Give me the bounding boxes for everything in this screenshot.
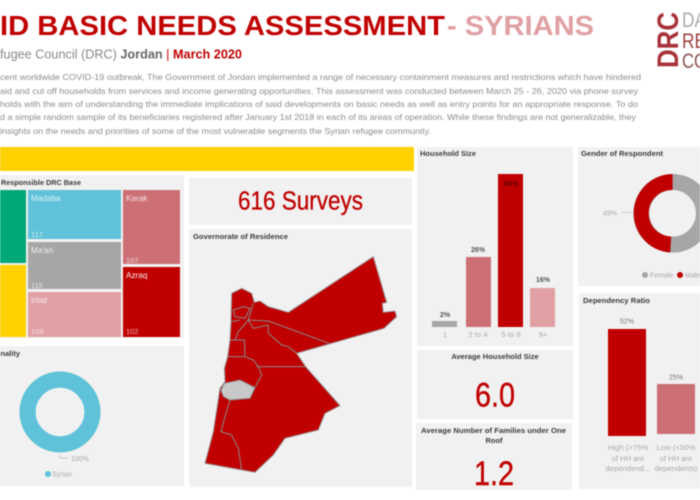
logo: DRC <box>652 9 700 73</box>
panel: average household size: Average Household Size <box>451 352 539 361</box>
intro text block <box>0 72 641 136</box>
panel: surveys count: 616 Surveys <box>238 188 363 216</box>
bar: 5 to 8: 5 to 8 <box>501 330 521 339</box>
panel: families under one roof <box>416 423 572 493</box>
yellow banner <box>0 147 414 171</box>
bar: 2 to 4 <box>466 247 491 339</box>
bar: high dependency: of HH are <box>612 454 644 463</box>
donut chart: gender <box>634 174 700 252</box>
intro text block: cent worldwide COVID-19 outbreak, The Government of Jordan implemented a range of necessary containment measures and restrictions which have hindered <box>0 72 641 82</box>
tile: Ma'an: Ma'an <box>31 246 53 255</box>
heading: responsible DRC base: Responsible DRC Base <box>1 178 81 187</box>
bar: low dependency: Low (<50% <box>657 443 695 452</box>
panel: families under one roof: Roof <box>485 436 503 445</box>
tile: Madaba: Madaba <box>31 194 61 203</box>
panel: average household size: 6.0 <box>475 376 515 414</box>
data label: 100% <box>60 455 89 463</box>
tile: Madaba <box>28 190 121 239</box>
tile: Irbid <box>28 292 121 337</box>
legend: gender <box>642 272 700 280</box>
heading: gender of respondent: Gender of Respondent <box>581 149 664 158</box>
tile: Karak <box>123 190 180 265</box>
map of Jordan <box>205 257 397 472</box>
bar: 1 <box>432 312 457 339</box>
intro text block: holds with the aim of understanding the immediate implications of said developments on basic needs as well as entry points for an appropriate response. To do <box>0 99 638 109</box>
panel: average household size <box>417 350 573 419</box>
panel: responsible DRC base treemap <box>0 175 184 338</box>
tile: Karak: Karak <box>126 194 148 203</box>
bar: 1: 2% <box>440 312 451 319</box>
bar: high dependency: High (>75% <box>608 443 648 452</box>
bar: 5 to 8: 58% <box>504 181 519 188</box>
legend: gender: Female <box>650 272 673 280</box>
bar: low dependency: of HH are <box>660 454 692 463</box>
bar: 9+: 16% <box>536 277 551 284</box>
bar: 9+: 9+ <box>539 330 548 339</box>
bar: 9+ <box>530 277 555 339</box>
tile: Madaba: 117 <box>31 230 43 239</box>
tile: Ma'an: 115 <box>31 281 43 290</box>
tile: Irbid: Irbid <box>31 296 47 305</box>
panel: families under one roof: 1.2 <box>474 455 514 493</box>
tile: Azraq: 102 <box>126 327 139 336</box>
bar: 1: 1 <box>443 330 447 339</box>
bar: high dependency: dependend... <box>606 464 650 473</box>
intro text block: aid and cut off households from services and income generating opportunities. This assessment was conducted between March 25 - 26, 2020 via phone survey <box>0 86 639 96</box>
tile: yellow <box>0 265 26 337</box>
panel: gender of respondent <box>578 147 700 286</box>
tile: Azraq <box>123 267 180 337</box>
legend: Syrian <box>45 471 72 478</box>
data label: 49%: 49% <box>603 210 617 218</box>
heading: governorate of residence: Governorate of Residence <box>193 232 288 241</box>
panel: surveys count <box>189 178 412 225</box>
bar: 2 to 4: 2 to 4 <box>468 330 488 339</box>
bar: high dependency: 52% <box>620 318 634 326</box>
logo: DRC: DRC <box>652 12 685 68</box>
panel: dependency ratio <box>579 293 700 489</box>
bar: 5 to 8 <box>498 174 523 339</box>
tile: Azraq: Azraq <box>126 271 148 280</box>
subtitle: fugee Council (DRC) Jordan | March 2020 <box>0 48 242 62</box>
donut chart: nationality <box>28 380 92 444</box>
panel: nationality <box>0 346 184 486</box>
tile: Karak: 107 <box>126 256 139 265</box>
panel: families under one roof: Average Number of Families under One <box>421 426 566 435</box>
bar: low dependency: 25% <box>669 374 683 382</box>
title: ID BASIC NEEDS ASSESSMENT <box>0 10 445 41</box>
tile: Ma'an <box>28 242 121 290</box>
intro text block: insights on the needs and priorities of some of the most vulnerable segments the Syrian refugee community. <box>0 126 431 136</box>
bar: low dependency: dependents) <box>655 464 698 473</box>
panel: governorate map <box>189 229 412 487</box>
bar: 2 to 4: 26% <box>471 247 486 254</box>
heading: nationality: nality <box>0 349 21 358</box>
legend: Syrian: Syrian <box>52 472 72 478</box>
bar: low dependency <box>655 374 698 473</box>
legend: gender: Male <box>685 272 700 280</box>
title: - SYRIANS <box>447 10 594 41</box>
heading: household size: Household Size <box>420 149 476 158</box>
panel: household size <box>417 147 573 346</box>
data label: 100%: 100% <box>71 456 89 463</box>
intro text block: d a simple random sample of its beneficiaries registered after January 1st 2018 in each of its areas of operation. While these findings are not generalizable, they <box>0 112 637 122</box>
heading: dependency ratio: Dependency Ratio <box>583 296 650 305</box>
tile: Irbid: 108 <box>31 327 44 336</box>
tile: green <box>0 190 26 263</box>
bar: high dependency <box>606 318 650 473</box>
